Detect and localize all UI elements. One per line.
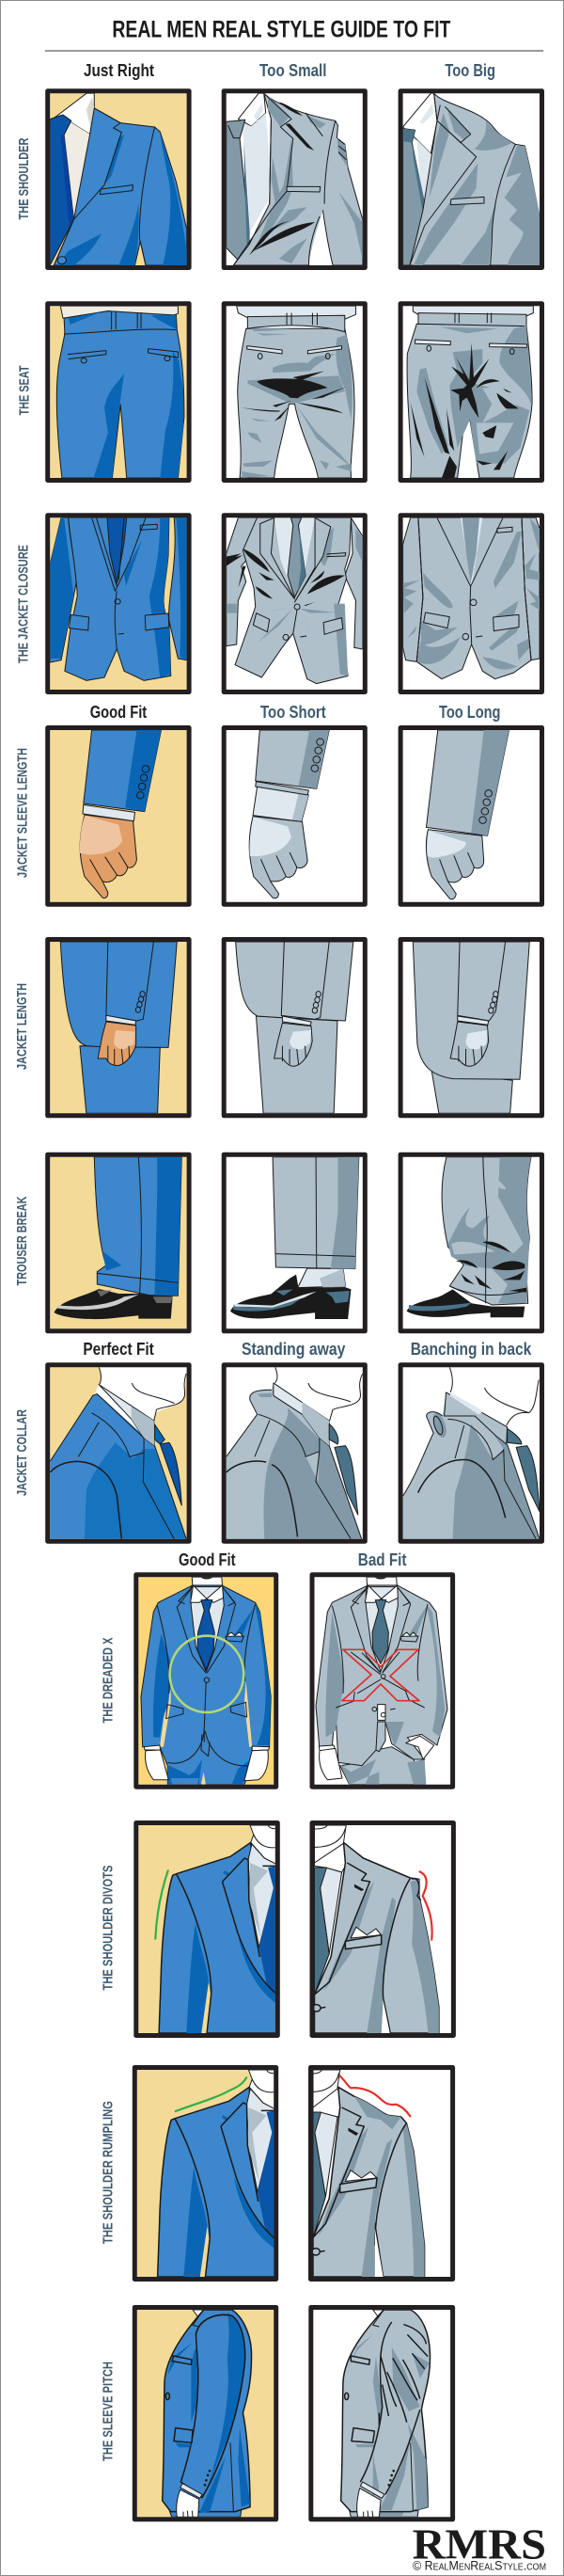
heading: Banching in back: Banching in back [411,1340,532,1359]
panel: sleeve good fit [48,728,189,904]
title: REAL MEN REAL STYLE GUIDE TO FIT [112,17,450,43]
panel: collar banching in back [400,1365,541,1541]
panel: seat too small [224,304,365,480]
heading: Perfect Fit: Perfect Fit [83,1340,154,1359]
panel: sleeve pitch good fit [134,2307,276,2520]
row label: the shoulder: THE SHOULDER [16,137,32,220]
row label: trouser break: TROUSER BREAK [14,1196,30,1285]
heading: Good Fit: Good Fit [90,703,147,722]
heading: Too Big: Too Big [445,61,495,80]
row label: jacket length: JACKET LENGTH [14,983,30,1070]
panel: closure too small [224,516,365,692]
logo: RMRS: © RealMenRealStyle.com [413,2558,546,2573]
heading: Bad Fit: Bad Fit [358,1550,407,1569]
panel: sleeve too long [400,728,541,904]
heading: Standing away: Standing away [242,1340,345,1359]
row label: the shoulder rumpling: THE SHOULDER RUMPLING [100,2101,117,2244]
row label: the dreaded X: THE DREADED X [100,1637,117,1724]
heading: Too Short: Too Short [260,703,326,722]
panel: collar perfect fit [48,1365,189,1541]
panel: shoulder divots good fit [136,1823,277,2036]
panel: shoulder just right [48,91,189,267]
panel: closure too big [400,516,541,692]
row label: the shoulder divots: THE SHOULDER DIVOTS [100,1865,117,1991]
panel: sleeve too short [224,728,365,904]
row label: the sleeve pitch: THE SLEEVE PITCH [100,2361,117,2461]
panel: trouser break too short [224,1154,365,1331]
row label: the jacket closure: THE JACKET CLOSURE [15,545,32,663]
row label: jacket collar: JACKET COLLAR [14,1409,30,1496]
logo: RMRS: RMRS [413,2520,546,2568]
panel: closure just right [48,516,189,692]
panel: shoulder rumpling good fit [134,2068,276,2279]
heading: Good Fit (dreaded X): Good Fit [179,1550,235,1569]
panel: length too long [400,939,541,1116]
row label: jacket sleeve length: JACKET SLEEVE LENGTH [15,748,30,878]
panel: shoulder rumpling bad fit [310,2068,453,2279]
row label: the seat: THE SEAT [17,365,32,416]
panel: seat too big [400,304,541,480]
panel: dreaded X bad fit [312,1575,453,1787]
panel: trouser break too long [400,1154,541,1331]
panel: length too short [224,939,365,1116]
panel: collar standing away [224,1365,365,1541]
panel: shoulder too small [224,91,365,267]
panel: dreaded X good fit [136,1575,276,1787]
panel: shoulder divots bad fit [312,1823,453,2036]
panel: trouser break good [48,1154,189,1331]
heading: Just Right: Just Right [84,61,154,80]
heading: Too Long: Too Long [439,703,500,722]
panel: shoulder too big [400,91,541,267]
panel: length good fit [48,939,189,1116]
panel: sleeve pitch bad fit [311,2307,453,2520]
heading: Too Small: Too Small [259,61,327,80]
panel: seat just right [48,304,189,480]
